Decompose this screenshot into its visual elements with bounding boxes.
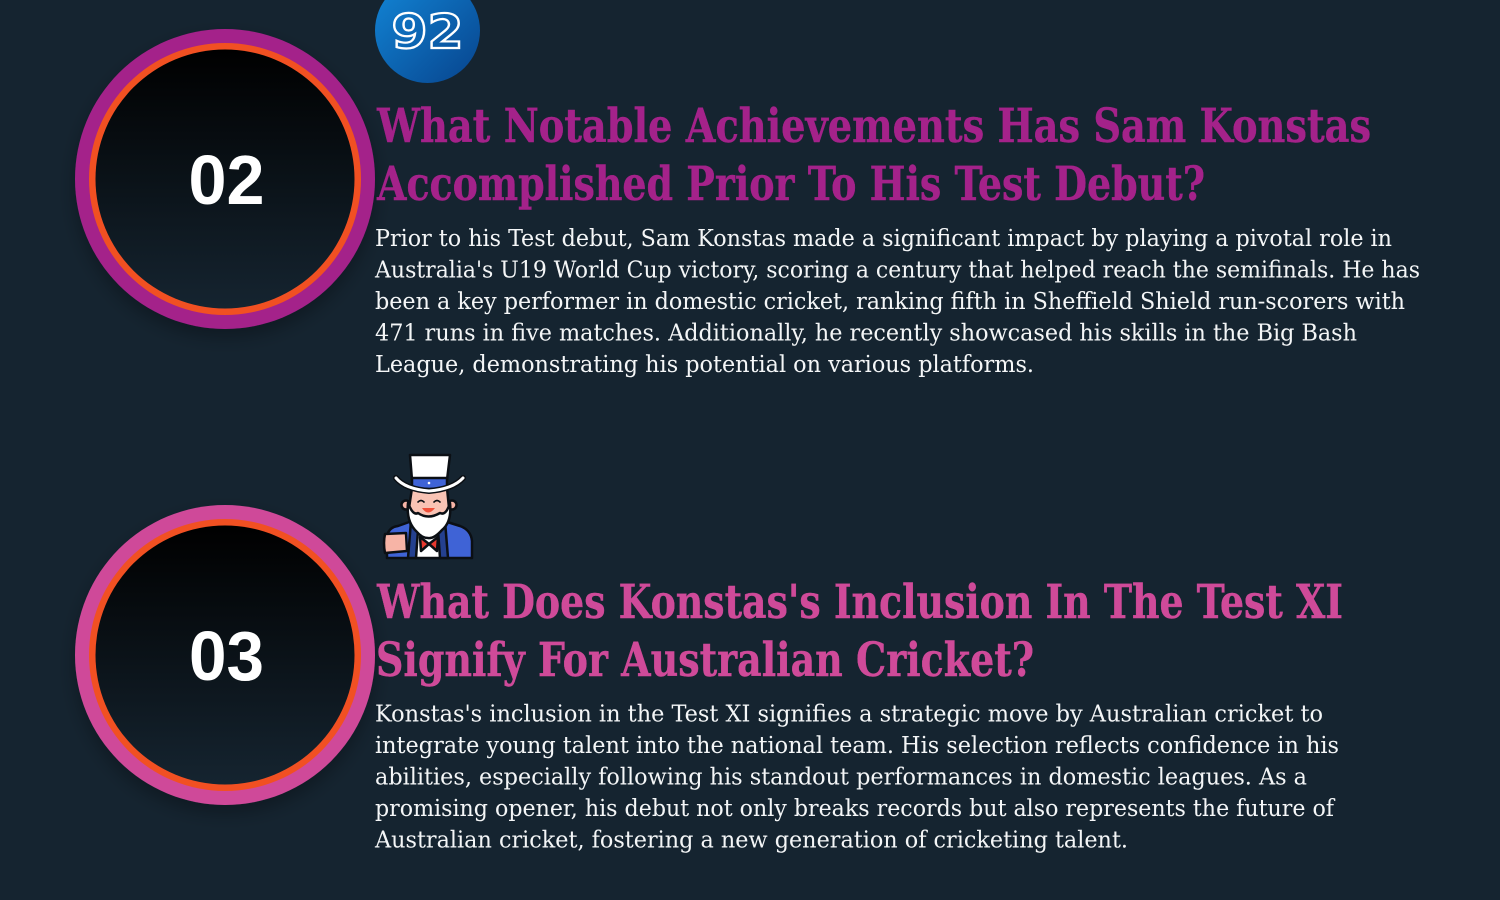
heading: section 02: What Notable Achievements Has Sam Konstas [376, 99, 1371, 154]
body text: section 02: Prior to his Test debut, Sam Konstas made a significant impact by playing a pivotal role in [375, 224, 1392, 252]
fist [384, 533, 407, 553]
body text: section 02: League, demonstrating his potential on various platforms. [375, 350, 1034, 378]
hat brim [396, 478, 463, 491]
icon: Uncle Sam [384, 455, 472, 558]
eyes [418, 500, 440, 502]
jacket [387, 521, 472, 558]
body text: section 03 [374, 700, 1339, 854]
panel: section 02 [75, 0, 1420, 378]
mouth [422, 508, 435, 512]
bow tie [420, 537, 438, 551]
number badge 03 [75, 505, 375, 805]
ears [402, 500, 410, 510]
panel: section 03 [75, 455, 1343, 854]
face [409, 488, 449, 522]
hat band [412, 478, 447, 489]
heading: section 02: Accomplished Prior To His Test Debut? [376, 157, 1205, 212]
beard [408, 503, 450, 538]
number badge 03: 03 [189, 617, 264, 695]
body text: section 03: Australian cricket, fostering a new generation of cricketing talent. [374, 826, 1128, 854]
heading: section 03: Signify For Australian Cricket? [376, 633, 1034, 688]
heading: section 02 [376, 99, 1371, 212]
body text: section 03: abilities, especially following his standout performances in domestic leagues. As a [375, 762, 1307, 790]
body text: section 02: Australia's U19 World Cup victory, scoring a century that helped reach the semifinals. He has [374, 256, 1420, 284]
number badge 02 [75, 29, 375, 329]
icon: 92 badge: 92 [392, 5, 464, 60]
number badge 02: 02 [188, 141, 264, 219]
body text: section 03: integrate young talent into the national team. His selection reflects confidence in his [375, 731, 1339, 759]
heading: section 03 [376, 575, 1343, 688]
body text: section 03: promising opener, his debut not only breaks records but also represents the future of [375, 794, 1336, 822]
body text: section 02 [374, 224, 1420, 378]
body text: section 03: Konstas's inclusion in the Test XI signifies a strategic move by Australian cricket to [375, 700, 1323, 728]
icon: 92 badge [375, 0, 480, 83]
hat crown [410, 455, 450, 480]
body text: section 02: been a key performer in domestic cricket, ranking fifth in Sheffield Shield run-scorers with [375, 287, 1405, 315]
body text: section 02: 471 runs in five matches. Additionally, he recently showcased his skills in the Big Bash [375, 318, 1357, 346]
heading: section 03: What Does Konstas's Inclusion In The Test XI [376, 575, 1343, 630]
